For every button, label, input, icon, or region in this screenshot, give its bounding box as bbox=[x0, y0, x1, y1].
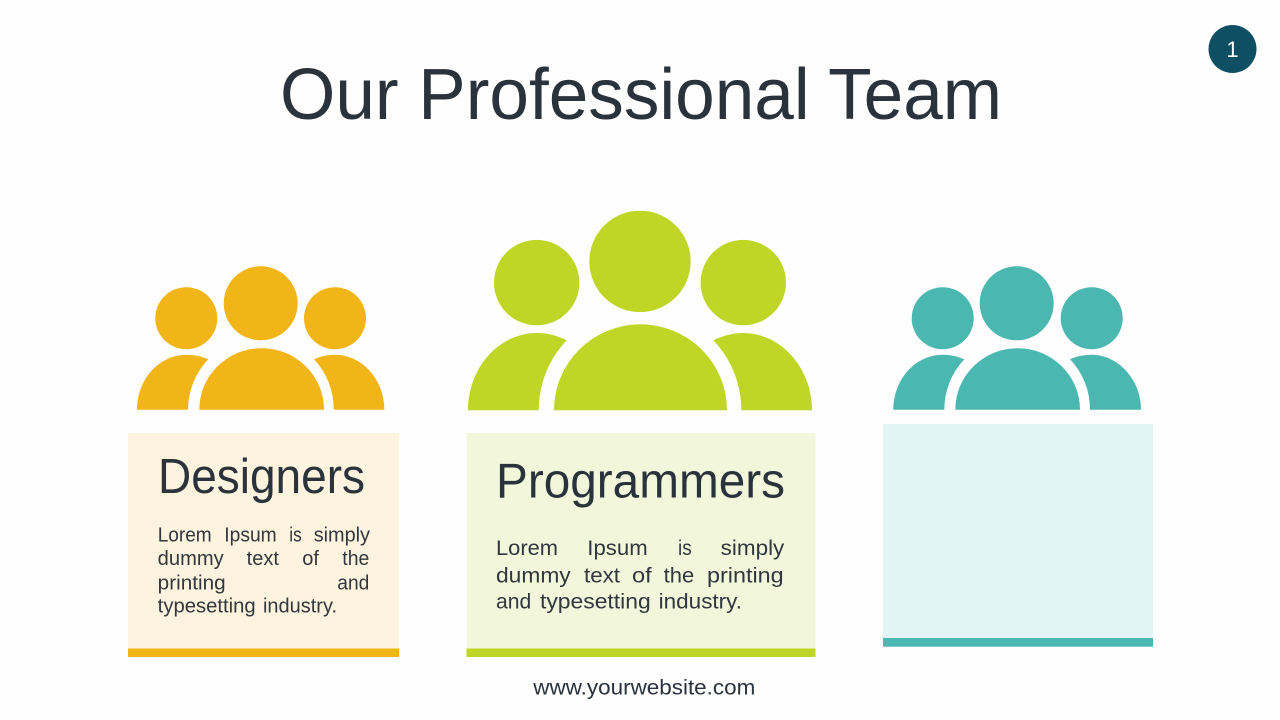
heading: designers: Designers bbox=[158, 450, 365, 504]
text block: programmers description: printing bbox=[707, 565, 784, 588]
title: Our Professional Team bbox=[280, 55, 1002, 135]
text block: designers description: and bbox=[337, 572, 369, 594]
text block: programmers description: dummy bbox=[496, 565, 571, 588]
text block: designers description: Ipsum bbox=[224, 525, 277, 547]
text block: designers description: dummy bbox=[158, 548, 224, 570]
heading: programmers: Programmers bbox=[496, 455, 785, 509]
icon: programmers team bbox=[468, 211, 812, 410]
text block: designers description: text bbox=[247, 548, 279, 570]
text block: programmers description: Lorem bbox=[496, 537, 558, 560]
panel: programmers bbox=[466, 433, 816, 657]
text block: programmers description: the bbox=[664, 565, 694, 588]
text block: programmers description: Ipsum bbox=[587, 537, 648, 560]
panel: designers bbox=[128, 433, 399, 657]
website footer: www.yourwebsite.com bbox=[532, 676, 755, 699]
text block: designers description: industry. bbox=[263, 596, 337, 618]
text block: programmers description: simply bbox=[721, 537, 785, 560]
text block: designers description: the bbox=[342, 548, 369, 570]
icon: third team bbox=[893, 266, 1141, 410]
text block: designers description: of bbox=[302, 548, 319, 570]
text block: designers description: Lorem bbox=[158, 525, 212, 547]
text block: programmers description bbox=[496, 537, 785, 613]
icon: designers team bbox=[137, 266, 384, 410]
page number badge: 1 bbox=[1226, 37, 1239, 62]
text block: designers description: printing bbox=[158, 572, 226, 594]
text block: designers description: is bbox=[289, 525, 302, 547]
panel: third team (empty) bbox=[883, 424, 1153, 647]
text block: programmers description: of bbox=[632, 565, 652, 588]
text block: programmers description: is bbox=[678, 537, 692, 560]
text block: programmers description: typesetting bbox=[540, 590, 651, 613]
text block: designers description: typesetting bbox=[158, 596, 256, 618]
text block: programmers description: text bbox=[584, 565, 620, 588]
text block: programmers description: industry. bbox=[659, 590, 742, 613]
text block: designers description bbox=[158, 525, 370, 618]
text block: designers description: simply bbox=[314, 525, 370, 547]
text block: programmers description: and bbox=[496, 590, 531, 613]
page number badge bbox=[1208, 25, 1256, 73]
